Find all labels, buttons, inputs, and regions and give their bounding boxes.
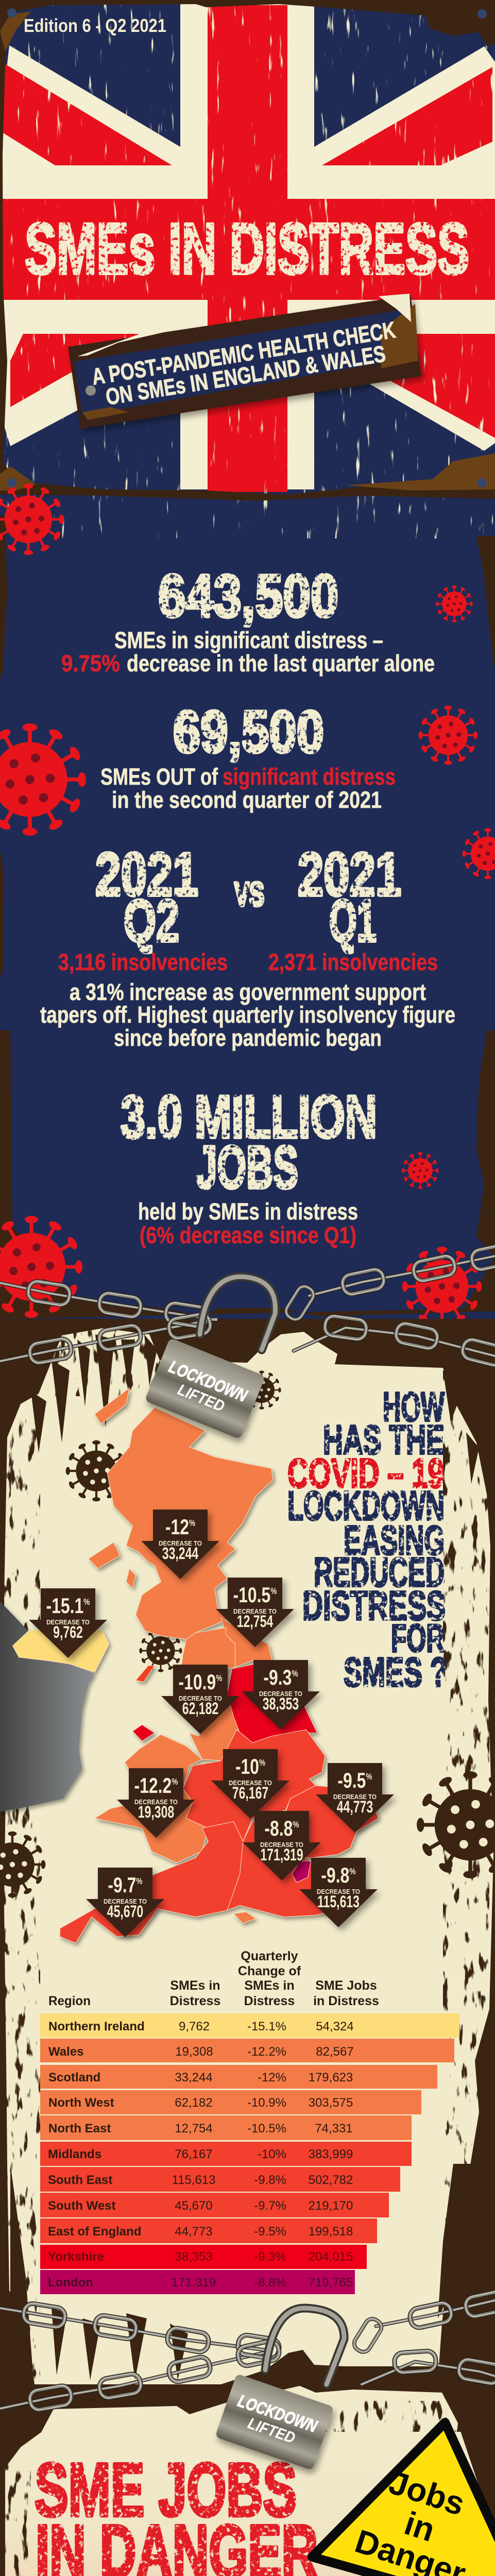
row: North East: -10.5% <box>247 2122 286 2136</box>
row: Wales <box>40 2039 454 2062</box>
callout: East of England: -9.5 <box>337 1768 366 1792</box>
shackle highlight <box>265 2308 344 2384</box>
chain and padlock 1 <box>0 1243 495 1439</box>
section edge drips <box>0 515 495 1319</box>
callout: Yorkshire: DECREASE TO <box>259 1690 302 1698</box>
callout: Northern Ireland <box>29 1588 107 1658</box>
row: East of England: 44,773 <box>175 2225 213 2239</box>
callout: South East: -9.8 <box>321 1863 349 1887</box>
row: East of England <box>40 2218 377 2243</box>
row: Scotland: -12% <box>258 2071 286 2084</box>
callout: Scotland <box>141 1510 219 1579</box>
row: Yorkshire: 38,353 <box>175 2250 213 2264</box>
icon: virus <box>463 828 495 879</box>
callout: Scotland: -12 <box>165 1515 189 1539</box>
row: South West <box>40 2193 389 2217</box>
row: Northern Ireland: 9,762 <box>179 2020 210 2033</box>
sign: jobs in danger <box>312 2422 495 2576</box>
stat: 69,500 <box>100 699 396 813</box>
icon: virus <box>402 1247 482 1326</box>
row: North West: North West <box>48 2096 114 2110</box>
padlock body <box>145 1337 265 1439</box>
Scotland <box>107 1408 273 1639</box>
callout: South West <box>86 1868 164 1937</box>
subtitle line 1: A POST-PANDEMIC HEALTH CHECK <box>90 316 398 390</box>
row: Northern Ireland: Northern Ireland <box>48 2020 145 2033</box>
callout: Wales: % <box>172 1777 178 1787</box>
table header: Change of <box>238 1964 301 1978</box>
row: London: 171,319 <box>172 2276 216 2290</box>
row: London: 719,765 <box>309 2276 353 2290</box>
callout: North West: -10.9 <box>179 1670 216 1694</box>
padlock body: LIFTED <box>175 1380 227 1415</box>
triangle <box>312 2422 495 2576</box>
padlock body <box>215 2374 334 2470</box>
chain and padlock 2 <box>0 2290 495 2470</box>
row: Yorkshire: -9.3% <box>254 2250 286 2264</box>
row: Wales: 19,308 <box>175 2045 213 2059</box>
callout: Midlands: -10 <box>235 1754 259 1778</box>
brown base <box>0 1319 495 2576</box>
Q1: Q1 <box>329 888 377 954</box>
callout: East of England <box>316 1763 394 1833</box>
panel: union flag sign <box>0 0 495 538</box>
North West <box>180 1628 240 1761</box>
row: East of England: -9.5% <box>254 2225 286 2239</box>
callout: Wales <box>117 1768 195 1838</box>
row: East of England: 199,518 <box>309 2225 353 2239</box>
callout: North East: 12,754 <box>237 1612 274 1631</box>
icon: virus <box>0 723 86 836</box>
icon: virus <box>139 1629 182 1672</box>
callout: London: -8.8 <box>264 1816 293 1840</box>
Northern Ireland <box>13 1628 109 1672</box>
2021 right: 2021 <box>298 840 401 909</box>
callout: Scotland: 33,244 <box>162 1544 199 1563</box>
vs: VS <box>234 875 264 913</box>
row: North East <box>40 2115 412 2140</box>
Isle of Wight <box>233 1912 255 1923</box>
line 1: SME JOBS <box>35 2448 297 2532</box>
callout: Yorkshire: % <box>292 1669 298 1679</box>
callout: South West: -9.7 <box>108 1873 136 1897</box>
icon: virus <box>0 1216 82 1318</box>
shackle <box>200 1277 275 1350</box>
table header: Distress <box>170 1994 220 2008</box>
Anglesey <box>132 1725 155 1741</box>
callout: North East: DECREASE TO <box>233 1607 277 1615</box>
white cross <box>0 0 495 489</box>
caption line 1: SMEs in significant distress – <box>114 627 383 653</box>
caption red: significant distress <box>223 764 396 790</box>
callout: East of England: % <box>366 1772 372 1782</box>
Q1 insolvencies: 2,371 insolvencies <box>268 949 438 975</box>
panel: subtitle plate <box>68 294 421 429</box>
table header: in Distress <box>313 1994 379 2008</box>
chain bars <box>0 2300 495 2409</box>
row: Scotland <box>40 2065 437 2089</box>
stat: 643,500 <box>61 562 435 676</box>
table header: Region <box>48 1994 91 2008</box>
row: South East: South East <box>48 2173 112 2187</box>
table: regions <box>40 1949 459 2294</box>
2021 left: 2021 <box>95 840 198 909</box>
row: South East <box>40 2167 400 2192</box>
table header: SME Jobs <box>315 1978 377 1993</box>
line 1: a 31% increase as government support <box>70 979 426 1005</box>
callout: Wales: DECREASE TO <box>134 1798 178 1806</box>
table header: Distress <box>244 1994 295 2008</box>
caption: held by SMEs in distress <box>138 1198 358 1225</box>
line: HOW <box>383 1384 445 1430</box>
sign line 1: Jobs <box>385 2464 469 2522</box>
row: Northern Ireland <box>40 2013 459 2038</box>
gradient edge speckles <box>0 2421 31 2576</box>
Ireland <box>0 1601 95 1812</box>
chain bars <box>0 1256 495 1361</box>
row: Northern Ireland: -15.1% <box>247 2020 286 2033</box>
row: North East: North East <box>48 2122 111 2136</box>
callout: Midlands: 76,167 <box>232 1784 268 1802</box>
brown viruses on cream <box>0 1370 495 1897</box>
subtitle line 2: ON SMEs IN ENGLAND & WALES <box>104 341 387 410</box>
row: Midlands <box>40 2142 412 2166</box>
row: London: -8.8% <box>254 2276 286 2290</box>
caption start: SMEs OUT of <box>100 764 218 790</box>
callout: Northern Ireland: 9,762 <box>53 1623 83 1641</box>
East of England <box>285 1786 379 1858</box>
navy background section <box>0 0 495 1327</box>
chain links <box>22 2290 495 2412</box>
row: North West: 62,182 <box>175 2096 213 2110</box>
row: Yorkshire <box>40 2245 367 2269</box>
callout: East of England: DECREASE TO <box>333 1793 377 1801</box>
table header: SMEs in <box>244 1978 295 1993</box>
viruses on navy <box>0 484 495 1326</box>
icon: virus <box>417 1771 495 1878</box>
row: North East: 74,331 <box>315 2122 353 2136</box>
row: Northern Ireland: 54,324 <box>316 2020 354 2033</box>
caption line 2: in the second quarter of 2021 <box>112 787 382 813</box>
row: Wales: -12.2% <box>247 2045 286 2059</box>
row: Midlands: -10% <box>258 2147 286 2161</box>
edge speckles <box>443 1370 489 2324</box>
callout: South West: 45,670 <box>107 1902 143 1921</box>
callout: North West: DECREASE TO <box>179 1694 222 1702</box>
corner screws <box>7 8 487 487</box>
callout: Wales: -12.2 <box>134 1773 172 1798</box>
panel: lower gradient section <box>0 2386 492 2576</box>
sign line 2: in <box>400 2504 439 2549</box>
callout: Midlands: % <box>259 1758 265 1768</box>
callout: Scotland: DECREASE TO <box>159 1539 202 1547</box>
brown streaks <box>10 1334 479 2380</box>
Midlands <box>183 1730 325 1841</box>
icon: virus <box>419 706 477 765</box>
top speckles <box>36 1329 165 1396</box>
row: London <box>40 2270 355 2294</box>
callout: North East <box>216 1578 294 1647</box>
icon: virus <box>242 1370 281 1410</box>
row: North East: 12,754 <box>175 2122 213 2136</box>
callout: South East <box>299 1858 378 1927</box>
chain links <box>27 1243 495 1367</box>
Q2 insolvencies: 3,116 insolvencies <box>58 949 228 975</box>
row: North West: -10.9% <box>247 2096 286 2110</box>
South West <box>60 1822 243 1943</box>
London <box>292 1861 311 1883</box>
row: Midlands: 383,999 <box>309 2147 353 2161</box>
red cross <box>0 5 495 492</box>
callout: Northern Ireland: DECREASE TO <box>46 1618 90 1626</box>
icon: virus <box>0 1832 45 1897</box>
shackle <box>265 2308 344 2384</box>
rust frame <box>0 0 495 501</box>
row: Scotland: Scotland <box>48 2071 100 2084</box>
heading: how has lockdown easing reduced distress <box>287 1384 447 1695</box>
Isle of Man <box>135 1666 155 1682</box>
callout: South East: 115,613 <box>317 1892 360 1911</box>
row: South East: -9.8% <box>254 2173 286 2187</box>
South East <box>227 1812 366 1917</box>
row: Wales: Wales <box>48 2045 83 2059</box>
row: Midlands: 76,167 <box>175 2147 213 2161</box>
edition label: Edition 6 - Q2 2021 <box>24 15 166 36</box>
callout: North West <box>161 1665 240 1734</box>
row: South West: 219,170 <box>309 2199 353 2213</box>
line: SMES ? <box>344 1649 447 1695</box>
callout: Northern Ireland: -15.1 <box>46 1594 83 1618</box>
number: 69,500 <box>173 699 324 765</box>
headline 1: 3.0 MILLION <box>121 1083 377 1150</box>
heading: SME jobs in danger <box>35 2448 318 2576</box>
row: South East: 115,613 <box>172 2173 215 2187</box>
line: FOR <box>391 1617 445 1660</box>
plate rivet <box>86 385 96 396</box>
rust blotches <box>0 11 495 490</box>
row: Scotland: 179,623 <box>309 2071 353 2084</box>
plate rust <box>82 304 418 420</box>
Hebrides <box>89 1388 135 1588</box>
stat: 3.0 million jobs <box>121 1083 377 1248</box>
callout: Yorkshire: 38,353 <box>263 1694 299 1713</box>
table header <box>48 1949 379 2008</box>
row: Scotland: 33,244 <box>175 2071 213 2084</box>
callout: North East: % <box>270 1586 277 1597</box>
callout: London: 171,319 <box>260 1845 303 1864</box>
callout: South West: DECREASE TO <box>104 1897 147 1905</box>
row: South West: South West <box>48 2199 116 2213</box>
Wales <box>95 1735 208 1862</box>
Yorkshire <box>227 1660 317 1743</box>
panel: cream map section <box>4 1328 493 2384</box>
row: East of England: East of England <box>48 2225 141 2239</box>
caption line 2: decrease in the last quarter alone <box>127 650 435 676</box>
row: Wales: 82,567 <box>316 2045 354 2059</box>
callout: Midlands: DECREASE TO <box>229 1779 272 1787</box>
red figure: 9.75% <box>61 650 120 676</box>
icon: virus <box>436 585 473 622</box>
row: Yorkshire: 204,015 <box>309 2250 353 2264</box>
icon: virus <box>0 484 64 555</box>
line 3: since before pandemic began <box>114 1025 382 1051</box>
flag red diagonals <box>3 63 495 438</box>
icon: virus <box>402 1152 439 1189</box>
callout: London: % <box>293 1820 299 1830</box>
callout: North West: 62,182 <box>182 1699 218 1718</box>
row: London: London <box>48 2276 93 2290</box>
flag white diagonals <box>0 45 495 451</box>
callout: South East: DECREASE TO <box>317 1888 360 1895</box>
flag scratches <box>0 0 495 538</box>
callout: Yorkshire: -9.3 <box>263 1665 292 1689</box>
Q2: Q2 <box>124 888 179 954</box>
number: 643,500 <box>158 562 338 630</box>
North East <box>221 1618 272 1667</box>
arrow callouts on map <box>29 1510 394 1937</box>
row: Midlands: Midlands <box>48 2147 101 2161</box>
row: South West: -9.7% <box>254 2199 286 2213</box>
callout: Midlands <box>211 1749 289 1819</box>
callout: Scotland: % <box>189 1518 195 1529</box>
row: South East: 502,782 <box>309 2173 353 2187</box>
plate face <box>74 309 415 416</box>
callout: South East: % <box>349 1867 356 1877</box>
callout: South West: % <box>136 1876 143 1887</box>
row: North West: 303,575 <box>309 2096 353 2110</box>
callout: Wales: 19,308 <box>138 1803 174 1821</box>
edge speckles <box>4 1360 40 2391</box>
callout: London <box>243 1811 321 1880</box>
gradient edge speckles <box>288 2401 464 2432</box>
icon: virus <box>66 1440 127 1501</box>
table header: Quarterly <box>241 1949 298 1963</box>
callout: London: DECREASE TO <box>260 1841 303 1849</box>
callout: East of England: 44,773 <box>337 1798 373 1816</box>
map of UK regions <box>0 1388 379 1943</box>
padlock body: LIFTED <box>246 2414 298 2447</box>
row: South West: 45,670 <box>175 2199 213 2213</box>
plate chips <box>77 294 411 357</box>
flag cross <box>0 0 495 492</box>
callout: North West: % <box>216 1673 222 1684</box>
row: Yorkshire: Yorkshire <box>48 2250 104 2264</box>
table header: SMEs in <box>170 1978 220 1993</box>
padlock body: LOCKDOWN <box>235 2391 320 2436</box>
row: North West <box>40 2090 421 2114</box>
caption red: (6% decrease since Q1) <box>140 1222 356 1248</box>
plate backing <box>68 295 421 429</box>
callout: North East: -10.5 <box>233 1583 270 1607</box>
shackle highlight <box>200 1277 275 1350</box>
callout: Yorkshire <box>242 1660 320 1730</box>
callout: Northern Ireland: % <box>83 1597 90 1607</box>
padlock body: LOCKDOWN <box>166 1357 250 1405</box>
comparison: 2021 Q2 vs Q1 <box>40 840 455 1051</box>
headline 2: JOBS <box>196 1133 298 1201</box>
